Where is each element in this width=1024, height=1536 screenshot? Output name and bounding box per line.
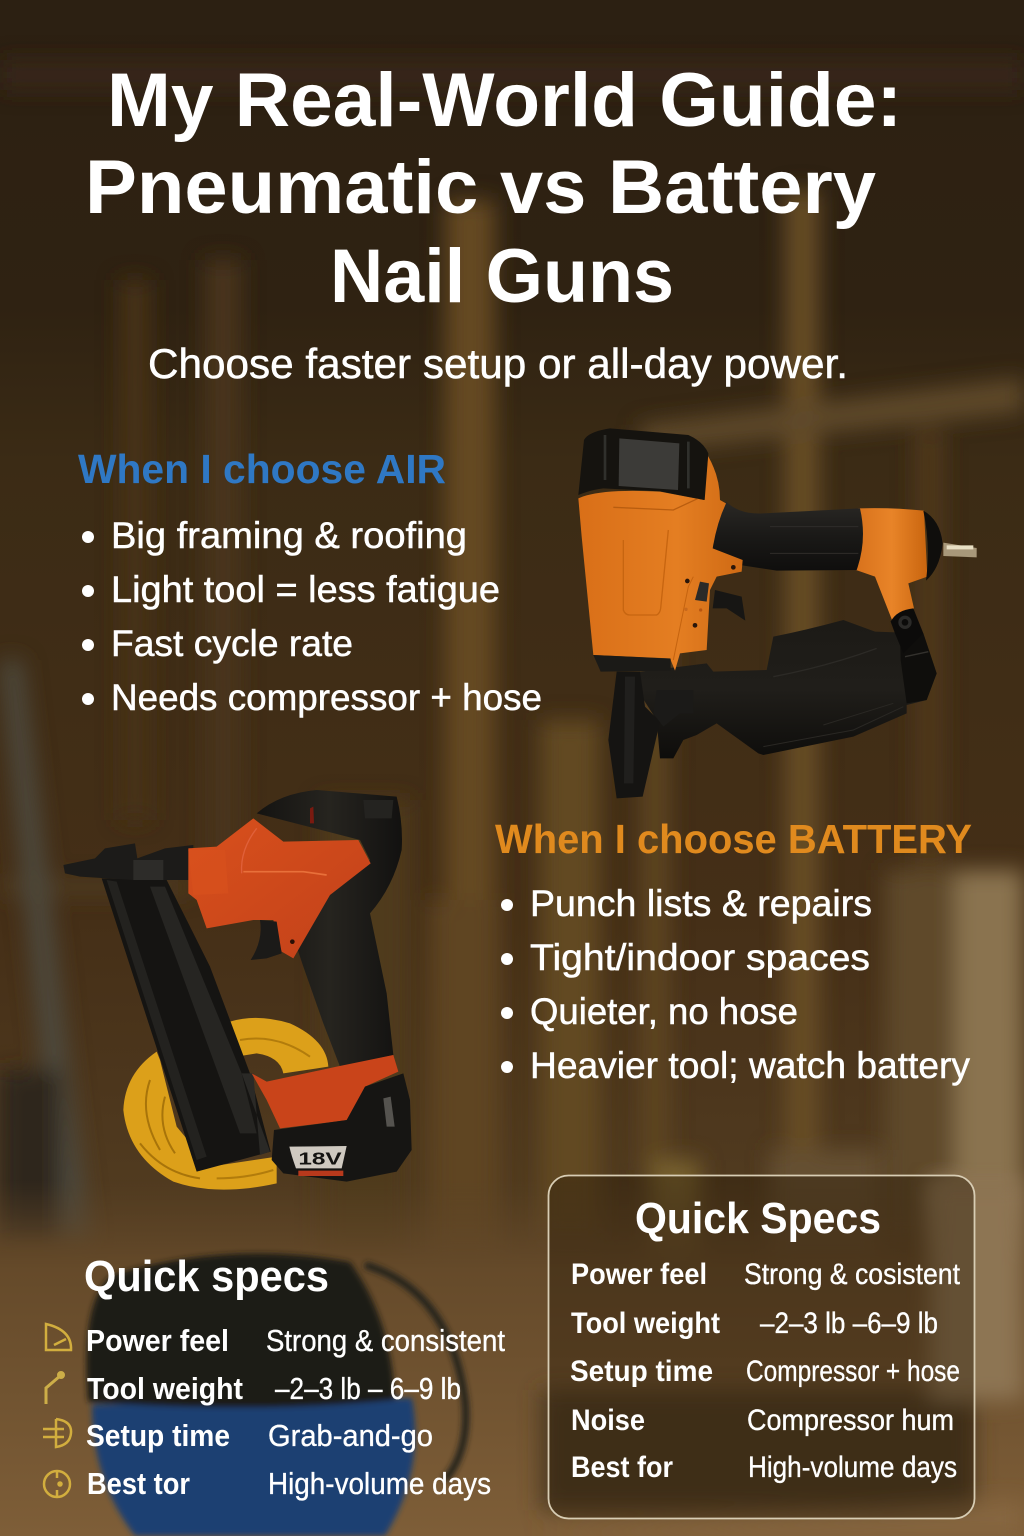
icon: target dial: [44, 1471, 70, 1497]
subtitle: Choose faster setup or all-day power.: [148, 340, 848, 387]
hose fitting: [943, 543, 977, 557]
trigger: [251, 920, 282, 960]
spec row: tool weight: –2–3 lb – 6–9 lb: [275, 1371, 461, 1406]
spec row: tool weight: Tool weight: [571, 1307, 720, 1340]
battery: [272, 1073, 412, 1182]
air bullet list: Big framing & roofing: [111, 515, 467, 556]
spec row: power feel: [571, 1258, 961, 1291]
spec row: best for: High-volume days: [748, 1451, 957, 1484]
red battery collar: [252, 1055, 398, 1128]
panel: left quick specs: [43, 1252, 505, 1501]
panel: when I choose air: [78, 446, 542, 718]
heading: quick specs box: Quick Specs: [635, 1194, 881, 1243]
battery bullet list: Punch lists & repairs: [530, 883, 872, 924]
spec row: tool weight: –2–3 lb –6–9 lb: [760, 1307, 938, 1340]
battery bullet list: Tight/indoor spaces: [530, 937, 870, 978]
nose: [608, 672, 660, 798]
spec row: power feel: Power feel: [86, 1323, 229, 1358]
icon: gauge: [46, 1324, 71, 1350]
spec row: best for: Best for: [571, 1451, 673, 1484]
blue compressor bag: [86, 1254, 466, 1536]
spec row: power feel: Power feel: [571, 1258, 707, 1291]
spec row: tool weight: [87, 1371, 461, 1406]
spec row: power feel: [86, 1323, 505, 1358]
heading: battery: When I choose BATTERY: [495, 816, 972, 862]
spec row: setup time: [86, 1418, 433, 1453]
spec row: setup time: [570, 1355, 960, 1388]
spec row: setup time: Setup time: [86, 1418, 230, 1453]
spec row: power feel: Strong & cosistent: [744, 1258, 961, 1291]
spec row: noise: Noise: [571, 1404, 645, 1437]
heading: air: When I choose AIR: [78, 446, 446, 492]
battery bullet list: Heavier tool; watch battery: [530, 1045, 970, 1086]
spec row: setup time: Grab-and-go: [268, 1418, 433, 1453]
title: Pneumatic vs Battery: [85, 145, 876, 230]
grip: [713, 502, 863, 571]
title: Nail Guns: [330, 234, 674, 319]
red housing: [188, 818, 371, 958]
rivets: [731, 565, 736, 570]
rear handle orange: [856, 508, 927, 622]
spec row: best for: Best tor: [87, 1466, 190, 1501]
spec row: noise: [571, 1404, 954, 1437]
icon: nail: [46, 1372, 64, 1404]
18V badge: [289, 1146, 347, 1168]
magazine drum: [627, 620, 937, 758]
panel: right quick specs: [548, 1176, 974, 1518]
icon: plug: [43, 1419, 71, 1447]
air bullet list: Light tool = less fatigue: [111, 569, 500, 610]
spec row: best for: [571, 1451, 957, 1484]
swivel joint: [891, 608, 923, 653]
air bullet list: Needs compressor + hose: [111, 677, 542, 718]
battery bullet list: [501, 883, 970, 1086]
rear handle: [257, 790, 402, 1067]
nose tip: [63, 843, 193, 880]
icon: red battery brad nailer with yellow hose: [63, 790, 412, 1190]
icon: orange pneumatic coil nailer: [578, 428, 977, 798]
spec row: tool weight: [571, 1307, 938, 1340]
spec row: setup time: Compressor + hose: [746, 1355, 960, 1388]
magazine: [102, 878, 271, 1172]
panel: when I choose battery: [495, 816, 972, 1086]
18V badge: 18V: [298, 1148, 342, 1168]
spec row: noise: Compressor hum: [747, 1404, 954, 1437]
spec row: tool weight: Tool weight: [87, 1371, 243, 1406]
yellow hose coil: [123, 1018, 328, 1190]
title: My Real-World Guide:: [107, 58, 902, 143]
head cap: [578, 428, 708, 500]
heading: quick specs: Quick specs: [84, 1252, 329, 1301]
battery bullet list: Quieter, no hose: [530, 991, 798, 1032]
air bullet list: [82, 515, 542, 718]
spec row: best for: [87, 1466, 491, 1501]
spec row: power feel: Strong & consistent: [266, 1323, 505, 1358]
air bullet list: Fast cycle rate: [111, 623, 353, 664]
base plate: [593, 655, 671, 672]
orange body: [578, 456, 743, 671]
title: [85, 58, 902, 319]
trigger: [713, 590, 745, 621]
spec row: best for: High-volume days: [268, 1466, 491, 1501]
spec row: setup time: Setup time: [570, 1355, 713, 1388]
